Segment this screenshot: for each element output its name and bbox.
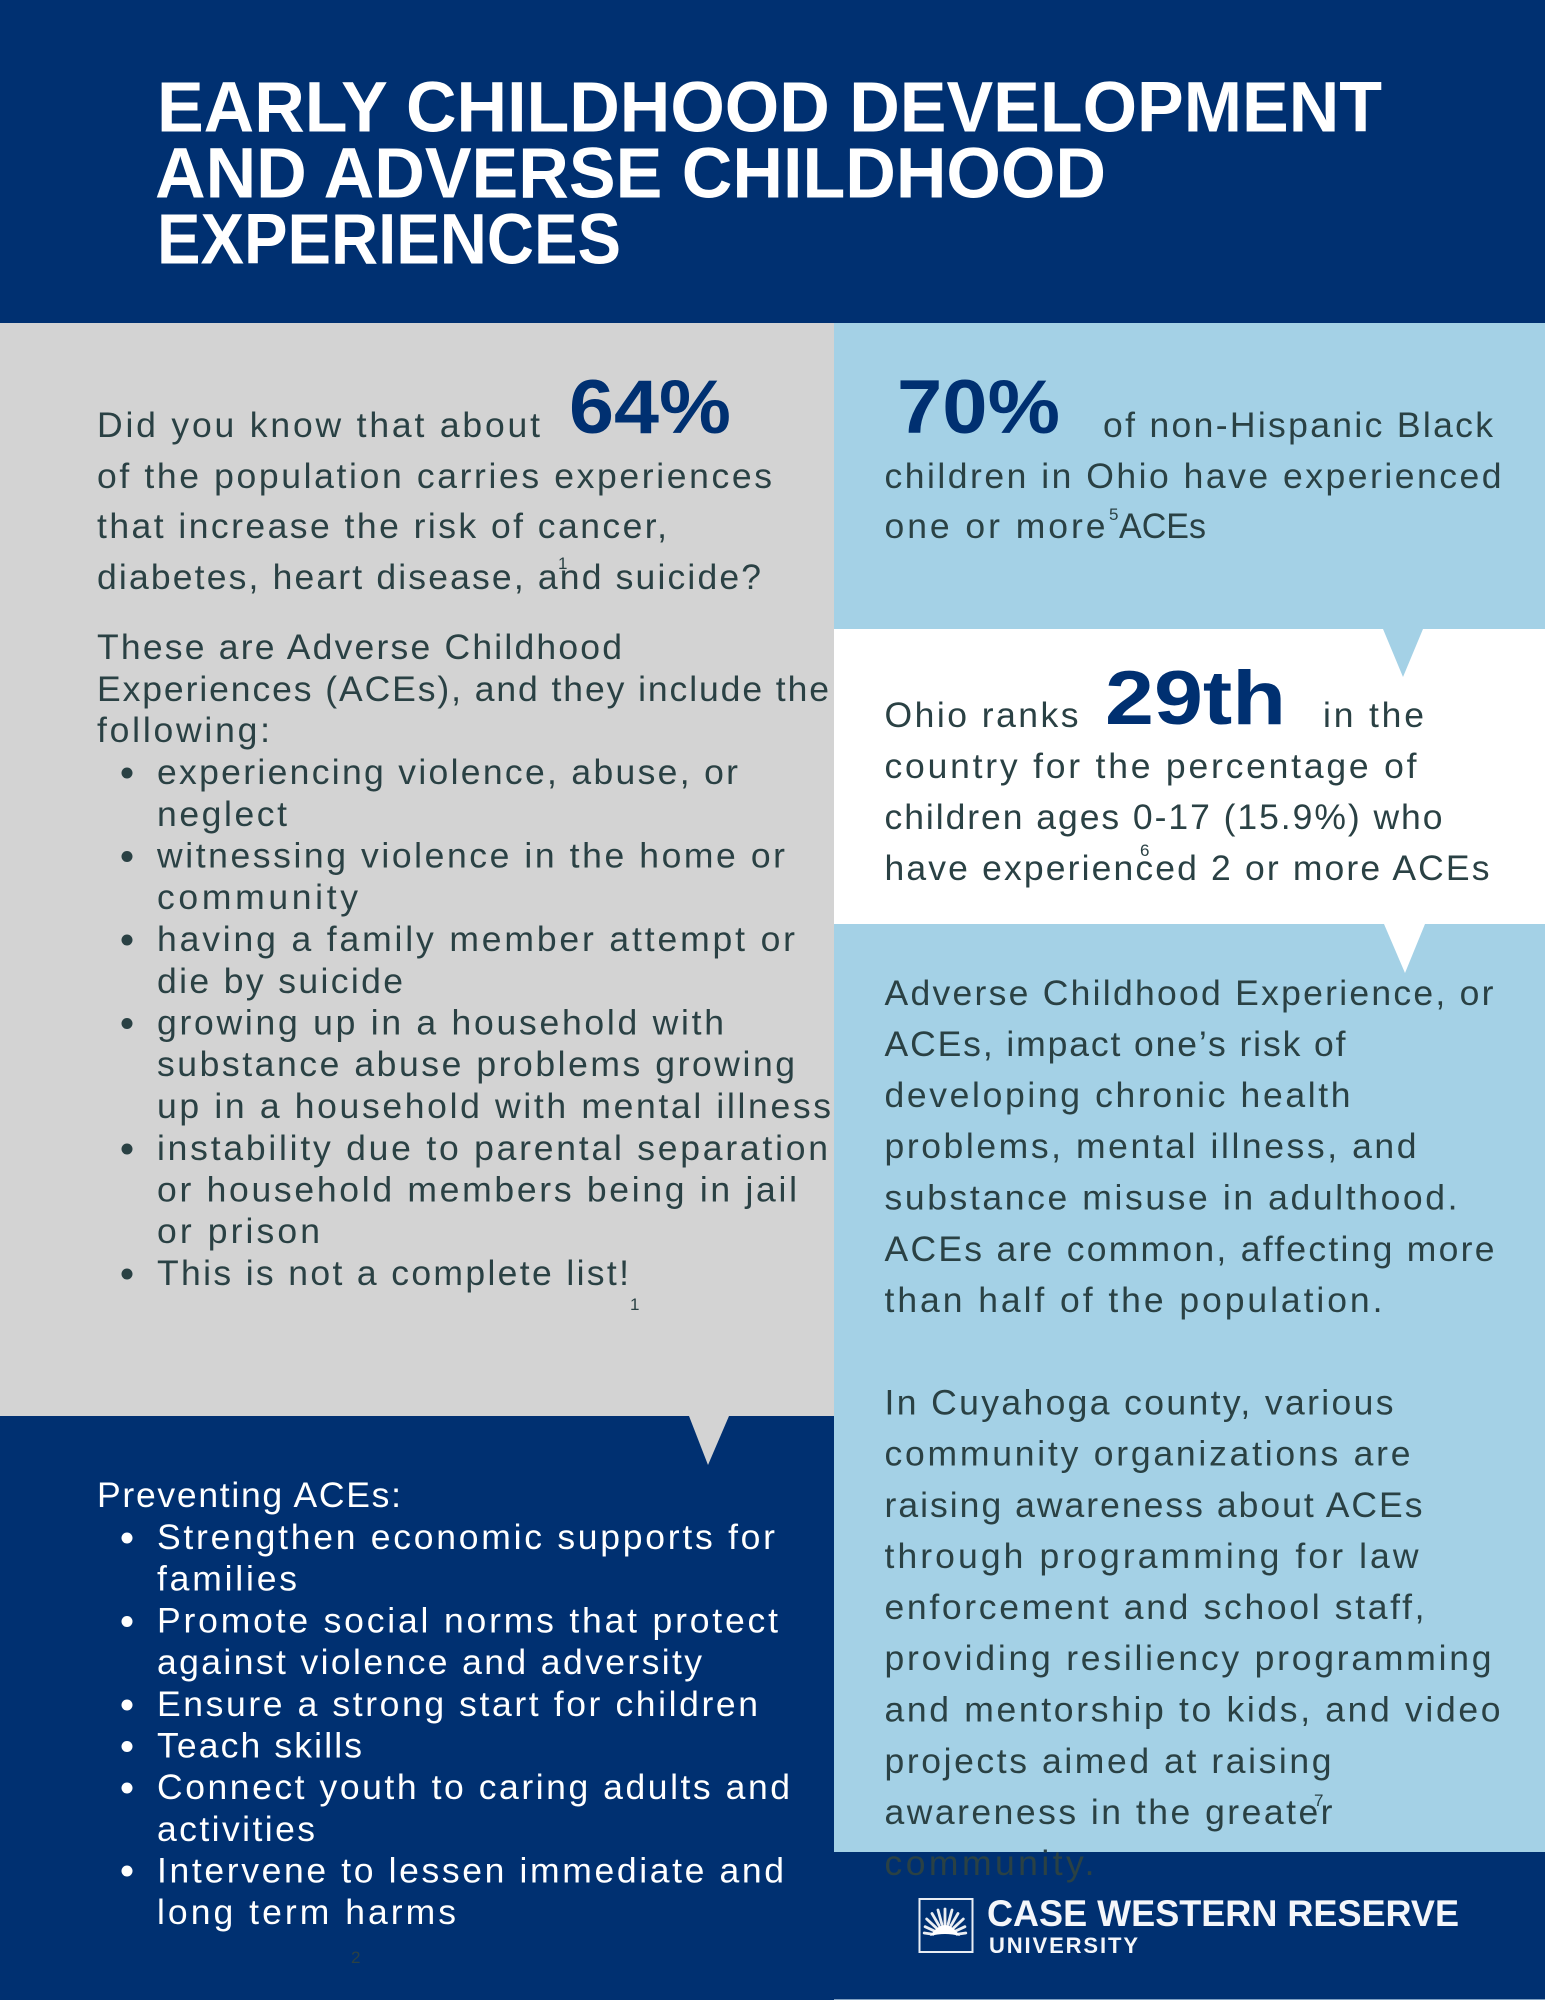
panel: 70% stat (light blue): of non-Hispanic Black (1103, 405, 1493, 445)
bullet list: ACE examples (122, 752, 831, 1314)
bullet list: ACE examples: substance abuse problems growing (157, 1044, 795, 1084)
bullet list: prevention strategies: Strengthen economic supports for (157, 1517, 775, 1557)
bullet list: prevention strategies: long term harms (157, 1892, 456, 1932)
logo: Case Western Reserve University (920, 1893, 1459, 1958)
panel: 70% stat (light blue): 5 (1109, 505, 1118, 524)
Cuyahoga county paragraph: and mentorship to kids, and video (884, 1690, 1500, 1730)
logo: Case Western Reserve University: CASE WESTERN RESERVE (987, 1893, 1459, 1934)
intro paragraph with 64% stat: Did you know that about (97, 405, 540, 445)
Cuyahoga county paragraph: enforcement and school staff, (884, 1587, 1424, 1627)
bullet list: ACE examples: This is not a complete list! (157, 1253, 629, 1293)
Cuyahoga county paragraph: awareness in the greater (884, 1792, 1333, 1832)
bullet list: ACE examples: 1 (630, 1295, 639, 1314)
preventing ACEs heading: Preventing ACEs: (97, 1475, 401, 1515)
panel: 70% stat (light blue): one or more (884, 506, 1106, 546)
ACEs impact paragraph: developing chronic health (884, 1075, 1350, 1115)
icon: sunburst in square (920, 1899, 972, 1952)
ACEs definition text: These are Adverse Childhood (97, 627, 622, 667)
panel: 29th rank stat (white): have experienced 2 or more ACEs (884, 848, 1490, 888)
panel: 29th rank stat (white): Ohio ranks (884, 695, 1078, 735)
header title: EARLY CHILDHOOD DEVELOPMENT (157, 68, 1382, 148)
bullet list: ACE examples: neglect (157, 794, 287, 834)
panel: 29th rank stat (white): country for the percentage of (884, 746, 1417, 786)
Cuyahoga county paragraph: community organizations are (884, 1434, 1410, 1474)
header title: EXPERIENCES (157, 200, 621, 280)
ACEs impact paragraph: problems, mental illness, and (884, 1126, 1416, 1166)
ACEs definition text: following: (97, 710, 270, 750)
header title: AND ADVERSE CHILDHOOD (155, 134, 1106, 214)
ACEs impact paragraph: Adverse Childhood Experience, or (884, 973, 1494, 1013)
bullet list: ACE examples: community (157, 877, 358, 917)
Cuyahoga county paragraph: raising awareness about ACEs (884, 1485, 1422, 1525)
header title (155, 68, 1382, 280)
bullet list: ACE examples: or household members being in jail (157, 1170, 797, 1210)
bullet list: ACE examples: die by suicide (157, 961, 403, 1001)
Cuyahoga county paragraph (884, 1382, 1500, 1883)
intro paragraph with 64% stat: diabetes, heart disease, and suicide? (97, 557, 761, 597)
footer band under panel (834, 1852, 1545, 2000)
callout pointer (1384, 924, 1425, 973)
bullet list: prevention strategies: Connect youth to caring adults and (157, 1767, 790, 1807)
Cuyahoga county paragraph: In Cuyahoga county, various (884, 1382, 1394, 1422)
Cuyahoga county paragraph: through programming for law (884, 1536, 1419, 1576)
panel: 29th rank stat (white) (834, 629, 1545, 924)
panel: 29th rank stat (white): 6 (1140, 841, 1149, 860)
Cuyahoga county paragraph: community. (884, 1843, 1094, 1883)
intro paragraph with 64% stat: of the population carries experiences (97, 456, 772, 496)
intro paragraph with 64% stat (97, 365, 772, 597)
bullet list: prevention strategies: activities (157, 1809, 315, 1849)
panel: ACEs impact and Cuyahoga programs (light blue) (834, 924, 1545, 2000)
bullet list: ACE examples: experiencing violence, abuse, or (157, 752, 738, 792)
panel: 29th rank stat (white): 29th (1105, 656, 1286, 741)
bullet list: ACE examples: having a family member attempt or (157, 919, 795, 959)
bullet list: ACE examples: witnessing violence in the home or (156, 836, 785, 876)
callout pointer (1383, 629, 1423, 677)
Cuyahoga county paragraph: providing resiliency programming (884, 1638, 1492, 1678)
panel: 29th rank stat (white): children ages 0-17 (15.9%) who (884, 797, 1442, 837)
panel: 70% stat (light blue): children in Ohio have experienced (884, 456, 1502, 496)
bullet list: prevention strategies: Teach skills (157, 1726, 362, 1766)
Cuyahoga county paragraph: projects aimed at raising (884, 1741, 1332, 1781)
logo: Case Western Reserve University: UNIVERSITY (989, 1933, 1138, 1958)
bullet list: prevention strategies: families (157, 1558, 297, 1598)
bullet list: ACE examples: instability due to parental separation (157, 1128, 828, 1168)
intro paragraph with 64% stat: 1 (558, 554, 567, 573)
ACEs impact paragraph: than half of the population. (884, 1280, 1382, 1320)
Cuyahoga county paragraph: 7 (1314, 1791, 1323, 1810)
ACEs impact paragraph (884, 973, 1494, 1320)
callout pointer (689, 1416, 729, 1465)
bullet list: prevention strategies: Intervene to lessen immediate and (157, 1850, 784, 1890)
intro paragraph with 64% stat: that increase the risk of cancer, (97, 506, 667, 546)
panel: 70% stat (light blue) (834, 323, 1545, 629)
ACEs definition text: Experiences (ACEs), and they include the (97, 669, 829, 709)
panel: 70% stat (light blue): ACEs (1119, 506, 1206, 546)
panel: 70% stat (light blue): 70% (897, 365, 1060, 450)
bullet list: ACE examples: growing up in a household with (157, 1002, 724, 1042)
panel: preventing ACEs (navy) (0, 1416, 833, 2000)
footnote marker 2: 2 (351, 1948, 360, 1967)
panel: 29th rank stat (white): in the (1323, 695, 1424, 735)
bullet list: prevention strategies: Promote social norms that protect (157, 1600, 778, 1640)
bullet list: prevention strategies (122, 1517, 790, 1932)
intro paragraph with 64% stat: 64% (569, 365, 731, 450)
ACEs impact paragraph: substance misuse in adulthood. (884, 1178, 1458, 1218)
bullet list: prevention strategies: against violence and adversity (157, 1642, 702, 1682)
bullet list: ACE examples: or prison (157, 1211, 320, 1251)
bullet list: prevention strategies: Ensure a strong start for children (157, 1684, 758, 1724)
bullet list: ACE examples: up in a household with mental illness (157, 1086, 831, 1126)
panel: what are ACEs (grey) (0, 323, 834, 1416)
ACEs definition text (97, 627, 829, 750)
ACEs impact paragraph: ACEs, impact one’s risk of (884, 1024, 1346, 1064)
ACEs impact paragraph: ACEs are common, affecting more (884, 1229, 1494, 1269)
